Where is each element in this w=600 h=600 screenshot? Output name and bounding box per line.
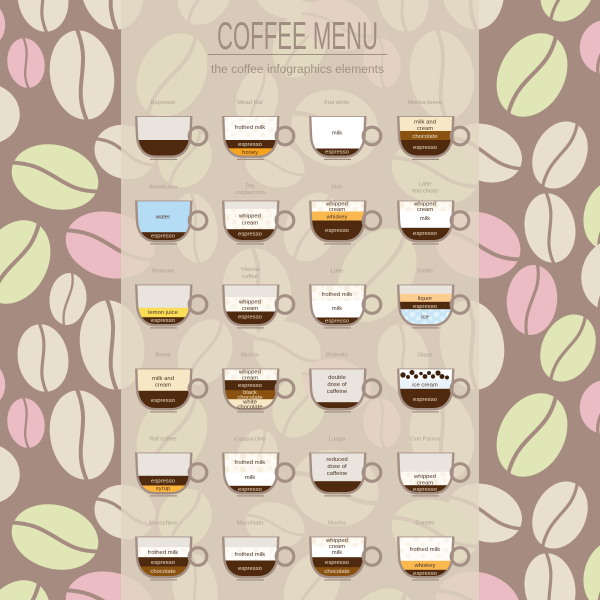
cup: Flat white: espresso: [325, 150, 350, 156]
cup: Fredo: espresso: [413, 304, 438, 310]
cup: Dry cappuccino: [222, 184, 294, 244]
cup: Macchiato: Macchiato: [237, 520, 264, 526]
cup: Irish: whipped: [325, 202, 348, 208]
cup: Flat white: milk: [332, 131, 342, 137]
cup: Con Panna: whipped: [413, 474, 436, 480]
cup: Con Panna: cream: [417, 480, 433, 486]
cup: Latte macchiato: Latte: [418, 182, 432, 188]
cup: Flat white: [309, 100, 381, 159]
cup: Breve: espresso: [151, 398, 176, 404]
cup: Vienna coffee: [222, 267, 294, 328]
cup: Latte macchiato: espresso: [413, 231, 438, 237]
cup: Raf coffee: syrup: [156, 486, 171, 492]
cup: Fredo: liquor: [418, 296, 432, 302]
cup: Mead Raf: [222, 100, 294, 159]
cup: Bicerin: cream: [242, 376, 258, 382]
cup: Mocha breve: cream: [417, 126, 433, 132]
cup: Mocha: milk: [332, 550, 342, 556]
cup: Mocha breve: chocolate: [412, 134, 438, 140]
cup: Irish: [309, 184, 381, 244]
cup: Macchiato: [222, 520, 294, 580]
cup: Con Panna: [397, 436, 469, 496]
cup: Mead Raf: honey: [242, 150, 258, 156]
cup: Flat white: Flat white: [324, 100, 350, 106]
cup: Macchiato: espresso: [238, 566, 263, 572]
cup: Ristretto: double: [328, 375, 347, 381]
cup: Raf coffee: [135, 436, 207, 496]
cup: Glace: [397, 352, 469, 412]
cup: Vienna coffee: whipped: [238, 300, 261, 306]
cup: Ristretto: [309, 352, 381, 412]
cup: Vienna coffee: cream: [242, 306, 258, 312]
cup: Irish: cream: [329, 207, 345, 213]
cup: Irish: whiskey: [326, 214, 348, 220]
cup: Dry cappuccino: cappuccino: [235, 190, 266, 196]
cup: Dry cappuccino: espresso: [238, 232, 263, 238]
cup: Ristretto: dose of: [327, 382, 347, 388]
title underline: [208, 54, 387, 55]
cup: Coretto: [397, 520, 469, 580]
cup: Mocha breve: espresso: [413, 145, 438, 151]
cup: Raf coffee: espresso: [151, 478, 176, 484]
cup: Fredo: [397, 268, 469, 328]
cup: Lungo: Lungo: [329, 436, 346, 442]
cup: Dry cappuccino: whipped: [238, 214, 261, 220]
cup: Lungo: dose of: [327, 464, 347, 470]
cup: Bicerin: [222, 352, 294, 412]
cup: Americano: Americano: [149, 184, 178, 190]
cup: Con Panna: espresso: [413, 487, 438, 493]
cup: Lungo: reduced: [326, 457, 348, 463]
cup: Latte macchiato: [397, 182, 469, 244]
cup: Lungo: [309, 436, 381, 496]
cup: Latte: Latte: [330, 268, 344, 274]
cup: Mocha breve: Mocha breve: [408, 100, 443, 106]
cup: Bicerin: black: [243, 390, 257, 396]
cup: Breve: [135, 352, 207, 412]
cup: Glace: Glace: [417, 352, 433, 358]
cup: Coretto: Coretto: [415, 520, 435, 526]
cup: Raf coffee: Raf coffee: [150, 436, 177, 442]
cup: Cappuccino: frothed milk: [235, 460, 265, 466]
cup: Marochino: [135, 520, 207, 580]
cup: Cappuccino: Cappuccino: [234, 436, 266, 442]
cup: Lungo: caffeine: [327, 471, 348, 477]
cup: Americano: water: [155, 214, 170, 220]
cup: Bicerin: white: [242, 400, 258, 406]
cup: Irish: espresso: [325, 228, 350, 234]
cup: Mocha: chocolate: [324, 569, 350, 575]
cup: Breve: Breve: [155, 352, 171, 358]
cup: Marochino: Marochino: [149, 520, 177, 526]
cup: Bicerin: espresso: [238, 383, 263, 389]
cup: Mead Raf: frothed milk: [235, 125, 265, 131]
cup: Romano: lemon juice: [148, 310, 179, 316]
cup: Glace: espresso: [413, 397, 438, 403]
cup: Dry cappuccino: Dry: [245, 184, 255, 190]
cup: Mocha: [309, 520, 381, 580]
cup: Mead Raf: espresso: [238, 142, 263, 148]
cup: Latte: [309, 268, 381, 328]
cup: Latte macchiato: whipped: [413, 202, 436, 208]
cup: Marochino: espresso: [151, 560, 176, 566]
title: COFFEE MENU: [217, 15, 378, 58]
cup: Americano: espresso: [151, 234, 176, 240]
cup: Latte: milk: [332, 306, 342, 312]
cup: Coretto: whiskey: [414, 563, 436, 569]
cup: Glace: ice cream: [412, 382, 438, 388]
cup: Breve: milk and: [152, 376, 174, 382]
cup: Latte macchiato: milk: [420, 216, 430, 222]
cup: Con Panna: Con Panna: [410, 436, 440, 442]
cup: Latte: frothed milk: [322, 292, 352, 298]
subtitle: the coffee infographics elements: [211, 64, 384, 76]
cup: Ristretto: caffeine: [327, 389, 348, 395]
cup: Mocha: espresso: [325, 560, 350, 566]
cup: Ristretto: Ristretto: [326, 352, 349, 358]
cup: Bicerin: Bicerin: [241, 352, 259, 358]
cup: Espresso: Espresso: [151, 100, 176, 106]
cup: Coretto: espresso: [413, 571, 438, 577]
cup: Macchiato: frothed milk: [235, 552, 265, 558]
cup: Marochino: frothed milk: [148, 550, 178, 556]
cup: Irish: Irish: [331, 184, 343, 190]
cup: Mocha: Mocha: [328, 520, 347, 526]
cup: Mocha breve: milk and: [414, 120, 436, 126]
panel: central translucent menu panel: [121, 0, 479, 600]
cup: Marochino: chocolate: [150, 569, 176, 575]
cup: Mocha: cream: [329, 544, 345, 550]
cup: Romano: espresso: [151, 318, 176, 324]
cup: Latte macchiato: macchiato: [412, 188, 439, 194]
cup: Mocha breve: [397, 100, 469, 159]
cup: Mead Raf: Mead Raf: [237, 100, 263, 106]
cup: Coretto: frothed milk: [410, 547, 440, 553]
cup: Latte: espresso: [325, 318, 350, 324]
cup: Romano: [135, 268, 207, 328]
cup: Latte macchiato: cream: [417, 207, 433, 213]
cup: Mocha: whipped: [325, 538, 348, 544]
cup: Cappuccino: [222, 436, 294, 496]
cup: Americano: [135, 184, 207, 244]
cup: Fredo: ice: [421, 314, 429, 320]
cup: Espresso: [135, 100, 207, 159]
cup: Vienna coffee: coffee: [242, 274, 259, 280]
cup: Cappuccino: milk: [245, 475, 255, 481]
cup: Vienna coffee: espresso: [238, 314, 263, 320]
cup: Fredo: Fredo: [417, 268, 433, 274]
cup: Bicerin: whipped: [238, 370, 261, 376]
cup: Bicerin: chocolate: [237, 404, 263, 410]
cup: Vienna coffee: Vienna: [241, 267, 260, 273]
cup: Cappuccino: espresso: [238, 487, 263, 493]
cup: Bicerin: chocolate: [237, 395, 263, 401]
cup: Dry cappuccino: cream: [242, 220, 258, 226]
cup: Breve: cream: [155, 382, 171, 388]
cup: Romano: Romano: [152, 268, 175, 274]
